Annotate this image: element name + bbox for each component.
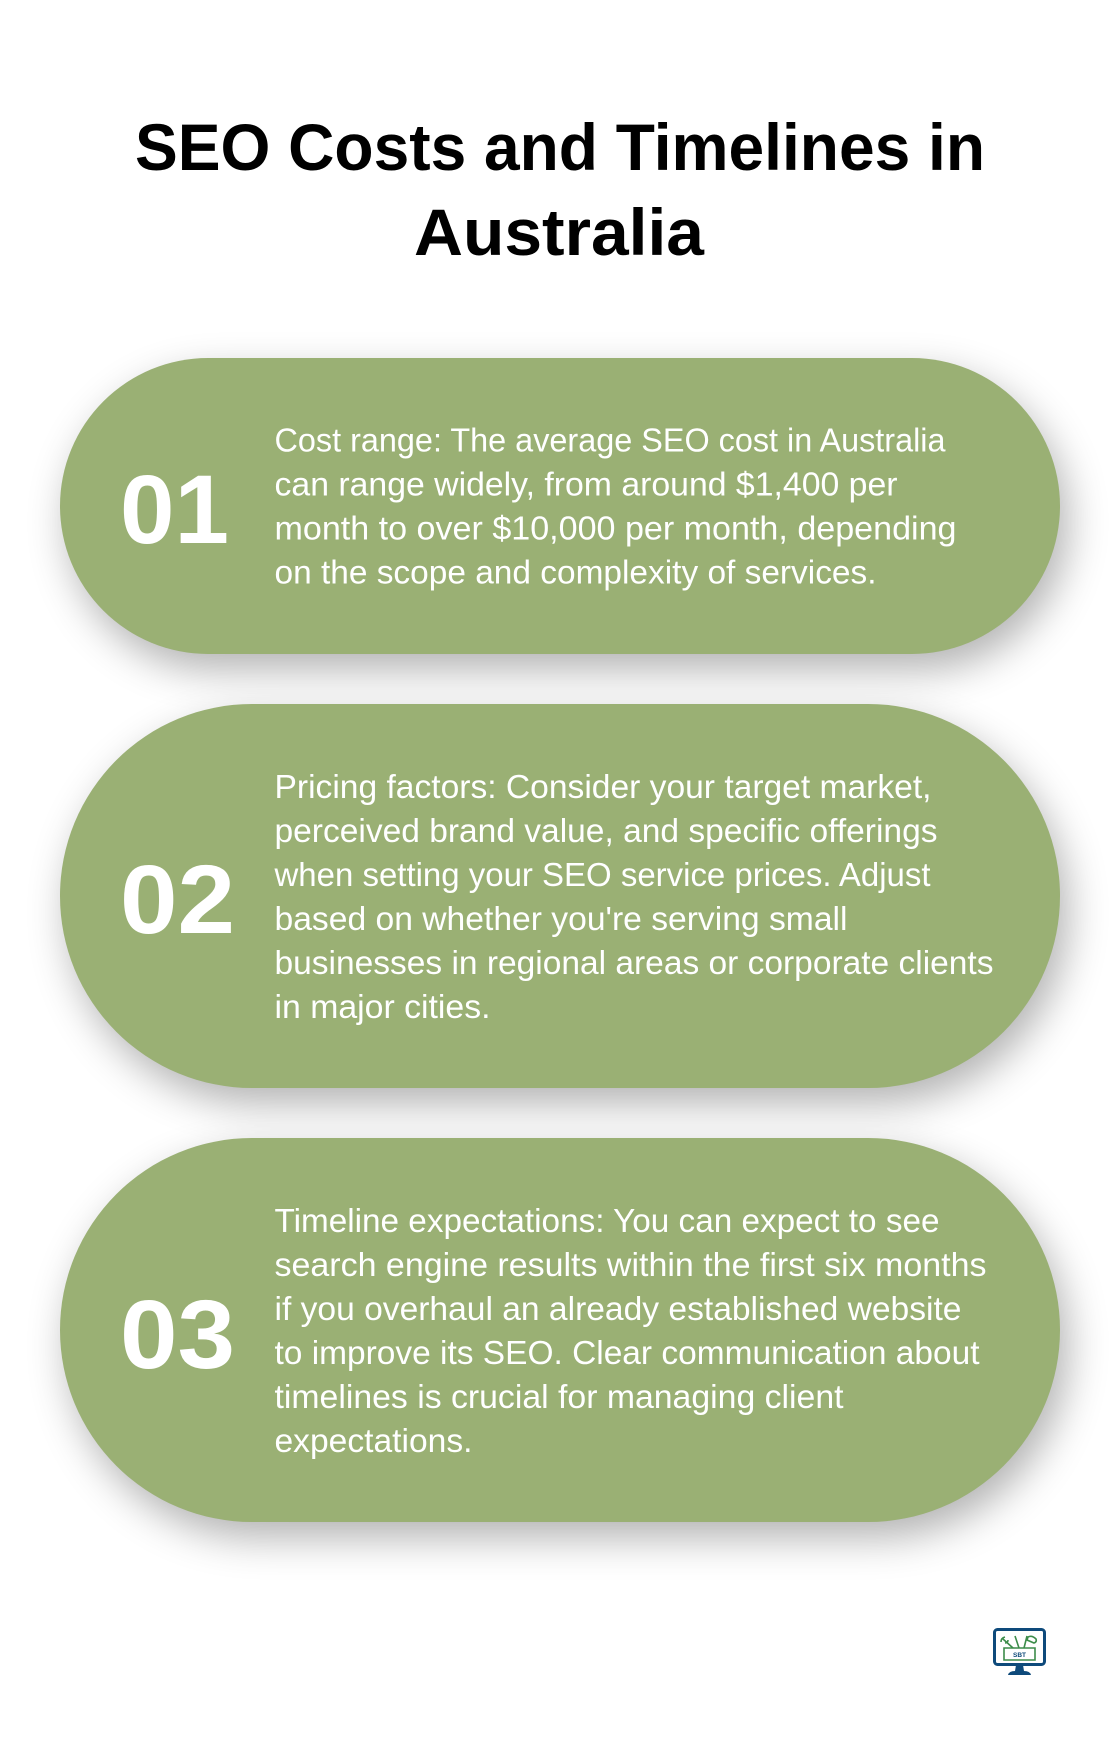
number 02: 02 <box>120 845 235 954</box>
text: cost range: can range widely, from around $1,400 per <box>274 466 898 502</box>
text: pricing factors: perceived brand value, and specific offerings <box>274 812 938 849</box>
text: cost range: Cost range: The average SEO cost in Australia <box>274 422 946 458</box>
text: pricing factors <box>274 768 994 1025</box>
title: SEO Costs and Timelines in <box>135 110 985 184</box>
title <box>135 110 985 269</box>
text: timeline expectations <box>274 1202 986 1459</box>
panel: pricing factors <box>60 704 1060 1088</box>
text: timeline expectations: expectations. <box>274 1422 472 1459</box>
text: cost range: month to over $10,000 per month, depending <box>274 510 956 546</box>
number 01: 01 <box>120 455 229 564</box>
text: cost range <box>274 422 956 590</box>
text: timeline expectations: if you overhaul an already established website <box>274 1290 962 1327</box>
panel: cost range <box>60 358 1060 654</box>
text: timeline expectations: Timeline expectations: You can expect to see <box>274 1202 939 1239</box>
text: cost range: on the scope and complexity of services. <box>274 554 876 590</box>
text: timeline expectations: search engine results within the first six months <box>274 1246 986 1283</box>
text: pricing factors: businesses in regional areas or corporate clients <box>274 944 994 981</box>
text: pricing factors: in major cities. <box>274 988 490 1025</box>
text: pricing factors: when setting your SEO service prices. Adjust <box>274 856 930 893</box>
text: timeline expectations: timelines is crucial for managing client <box>274 1378 844 1415</box>
icon: logo monitor with toolbox <box>993 1628 1046 1675</box>
icon: logo monitor with toolbox: SBT <box>1013 1652 1026 1659</box>
text: pricing factors: Pricing factors: Consider your target market, <box>274 768 932 805</box>
text: timeline expectations: to improve its SEO. Clear communication about <box>274 1334 980 1371</box>
title: Australia <box>414 195 705 269</box>
text: pricing factors: based on whether you're serving small <box>274 900 848 937</box>
panel: timeline expectations <box>60 1138 1060 1522</box>
number 03: 03 <box>120 1280 235 1389</box>
